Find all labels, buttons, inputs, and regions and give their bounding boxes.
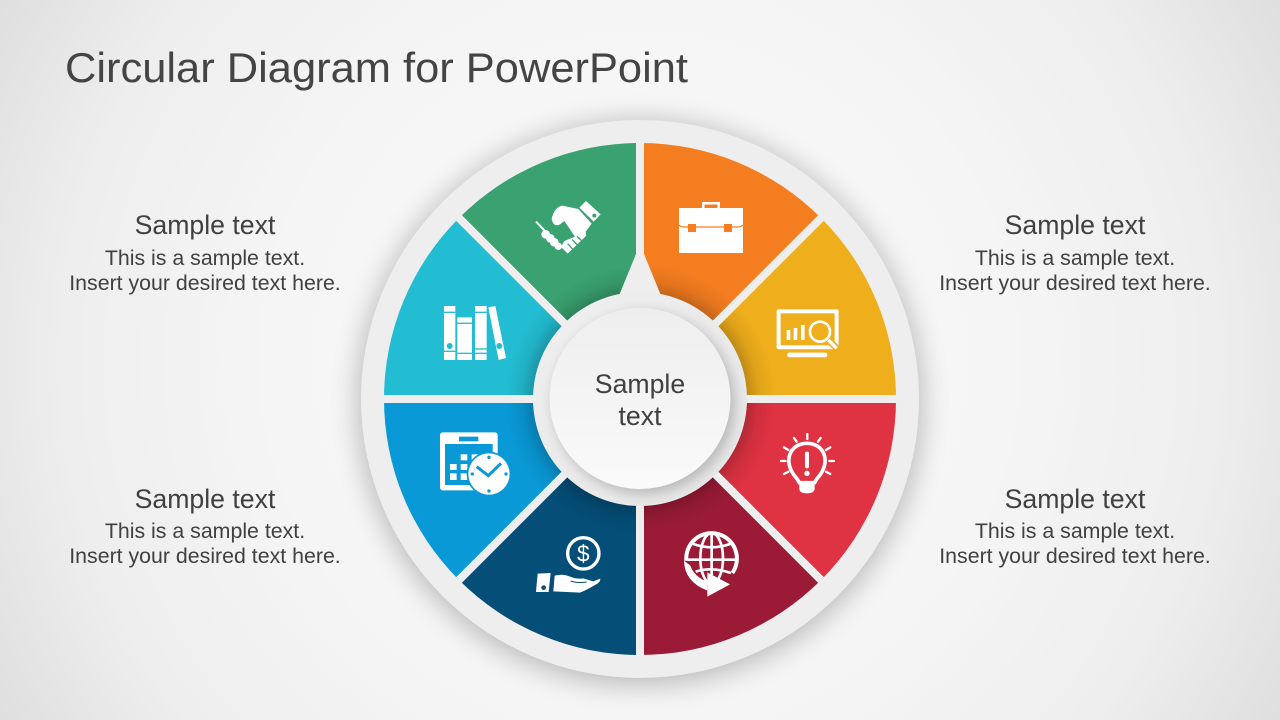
segment: blue (384, 403, 562, 578)
text block: top left: Insert your desired text here. (69, 271, 341, 295)
segment: maroon (644, 477, 818, 655)
circular diagram (341, 100, 939, 698)
text block: bottom left: Insert your desired text here. (69, 544, 341, 568)
icon: monitor with magnifier (777, 309, 839, 357)
text block: top left (69, 210, 341, 295)
text block: top left: Sample text (135, 210, 276, 240)
text block: bottom right (939, 484, 1211, 568)
title: Circular Diagram for PowerPoint (65, 44, 688, 91)
text block: top left: This is a sample text. (105, 246, 305, 270)
center disc: text (619, 401, 662, 431)
icon: hand with coin: $ (577, 540, 590, 566)
text block: top right: Insert your desired text here. (939, 271, 1211, 295)
text block: bottom left (69, 484, 341, 568)
text block: bottom left: This is a sample text. (105, 519, 305, 543)
icon: briefcase (679, 202, 743, 253)
icon: light bulb (781, 434, 834, 493)
icon: hand with coin (536, 538, 600, 593)
segment: green (462, 143, 636, 320)
text block: bottom right: Sample text (1005, 484, 1146, 514)
segment gaps (376, 135, 904, 663)
segment: yellow (718, 220, 896, 395)
icon: handshake (536, 201, 601, 254)
text block: top right: This is a sample text. (975, 246, 1175, 270)
icon: books (444, 306, 506, 360)
text block: bottom right: Insert your desired text here. (939, 544, 1211, 568)
center disc (550, 308, 735, 494)
segment: red (718, 403, 896, 578)
segment: teal (384, 220, 562, 395)
wheel segments (384, 143, 896, 655)
text block: bottom right: This is a sample text. (975, 519, 1175, 543)
text block: bottom left: Sample text (135, 484, 276, 514)
text block: top right (939, 210, 1211, 295)
center disc: Sample (595, 369, 685, 399)
segment: orange (644, 143, 818, 320)
outer ring (359, 120, 921, 684)
text block: top right: Sample text (1005, 210, 1146, 240)
segment: navy (462, 477, 636, 655)
icon: calendar with clock (440, 432, 511, 496)
icon: globe with arrow (684, 533, 737, 597)
hub with pointer (533, 254, 747, 506)
